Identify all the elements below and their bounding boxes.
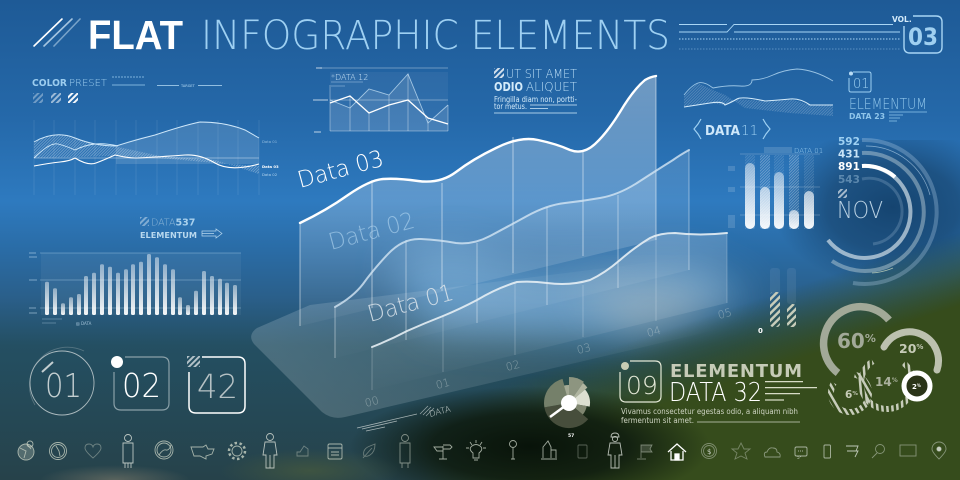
legend xyxy=(262,139,279,177)
badge: 01 Elementum Data 23: DATA 23 xyxy=(849,112,885,121)
60 percent: 60 xyxy=(837,329,865,353)
axis labels xyxy=(363,306,733,410)
icon: chat xyxy=(795,447,807,459)
number badge: 01 xyxy=(29,347,94,415)
subheading: DATA 32 xyxy=(669,378,762,408)
legend: Data 01 xyxy=(262,139,278,144)
badge: 01 Elementum Data 23: 01 xyxy=(853,77,870,92)
heading: color preset: PRESET xyxy=(69,78,107,89)
box 09 xyxy=(620,361,661,402)
icon: signpost xyxy=(434,445,452,459)
panel: radial November chart xyxy=(828,136,937,284)
bars xyxy=(45,254,237,315)
panel: Elementum Data 32 xyxy=(620,361,817,425)
text block: Ut sit amet: tor metus. xyxy=(494,102,527,111)
14 percent xyxy=(850,346,924,420)
icon: pin key xyxy=(510,440,516,459)
panel: polar chart xyxy=(544,377,590,439)
chart: Data 01 xyxy=(365,233,727,390)
label: Data 02: Data 02 xyxy=(326,208,418,256)
icon: woman xyxy=(400,434,410,468)
number badge: 42 xyxy=(187,356,245,413)
heading: ELEMENTUM xyxy=(670,361,802,382)
chart: Data 03 xyxy=(295,76,656,326)
14 percent: 14 xyxy=(875,375,892,389)
label: Data 11: 11 xyxy=(741,123,758,139)
icon: home xyxy=(668,444,686,460)
axis labels: 04 xyxy=(645,324,662,340)
icon: hatch xyxy=(494,68,504,78)
icon: title slashes xyxy=(34,19,80,46)
icon: clock xyxy=(50,442,66,460)
icon: tablet xyxy=(578,445,587,458)
icon: map xyxy=(191,445,214,459)
box 09: 09 xyxy=(626,371,658,400)
label: Data 11 xyxy=(694,119,770,139)
label: Data 11: DATA xyxy=(705,124,740,139)
series white xyxy=(330,96,448,124)
6 percent: 6 xyxy=(845,389,852,401)
body text xyxy=(621,406,798,425)
number badge: 02: 02 xyxy=(122,366,161,405)
badge: 01 Elementum Data 23 xyxy=(849,72,927,121)
title: INFOGRAPHIC ELEMENTS: INFOGRAPHIC ELEMENTS xyxy=(201,13,670,59)
text block: Ut sit amet: UT SIT AMET xyxy=(506,66,577,81)
axis caption: DATA xyxy=(357,405,452,431)
label: NOV: NOV xyxy=(837,198,883,224)
icon: woman xyxy=(123,434,133,468)
axis labels: 02 xyxy=(504,358,521,374)
caption: ▨ DATA xyxy=(76,321,92,326)
icon: bulb xyxy=(466,440,486,460)
volume box xyxy=(904,16,942,53)
icon: hand xyxy=(297,446,308,456)
icon: magnifier xyxy=(872,444,884,458)
values: 592 xyxy=(838,136,860,148)
label: Data 01: Data 01 xyxy=(365,280,457,328)
heading: color preset: COLOR xyxy=(32,78,67,89)
header title xyxy=(34,12,670,59)
heading: ELEMENTUM xyxy=(140,231,197,240)
heading: DATA537 xyxy=(151,218,195,228)
icon: arrow xyxy=(846,446,858,457)
icon: laptop xyxy=(900,445,916,456)
VOL label: VOL. xyxy=(892,15,912,24)
panel: Data 01 vertical bar chart: DATA 01 xyxy=(794,147,823,155)
panel: Data 12 line chart xyxy=(313,68,448,132)
icon: gear xyxy=(229,443,245,459)
swatches xyxy=(33,93,78,103)
icon: heart xyxy=(85,444,101,458)
bars xyxy=(745,163,814,229)
icon: buildings xyxy=(541,441,557,459)
caption xyxy=(42,319,92,326)
text block: Ut sit amet: Fringilla diam non, portti- xyxy=(494,95,577,104)
target rule xyxy=(157,84,222,88)
icon: dollar: $ xyxy=(707,448,711,456)
panel: polar chart: 57 xyxy=(568,433,574,439)
14 percent: % xyxy=(892,377,898,384)
axis labels: 05 xyxy=(716,306,733,322)
badge: 01 Elementum Data 23: ELEMENTUM xyxy=(849,95,927,113)
values xyxy=(838,136,860,186)
values: 431 xyxy=(838,148,860,160)
axis labels: 01 xyxy=(434,376,451,392)
axis labels: 03 xyxy=(575,341,592,357)
body text: fermentum sit amet. xyxy=(621,415,694,425)
panel: top-right mini area chart xyxy=(684,69,833,116)
icon: hatch xyxy=(838,189,847,198)
label: Data 03: Data 03 xyxy=(295,146,387,194)
values: 891 xyxy=(838,161,860,173)
icon: star xyxy=(732,443,750,459)
number badge: 42: 42 xyxy=(197,367,238,406)
60 percent xyxy=(824,307,889,373)
2 percent xyxy=(904,373,930,399)
label: DATA 12: *DATA 12 xyxy=(331,73,368,82)
number badge: 01: 01 xyxy=(45,366,82,405)
series grey xyxy=(330,74,448,123)
hatched mini bars xyxy=(758,268,796,335)
area series xyxy=(116,122,259,164)
title: FLAT: FLAT xyxy=(88,12,183,58)
legend: Data 02 xyxy=(262,172,278,177)
20 percent: 20 xyxy=(899,341,916,356)
icon: globe with pin xyxy=(18,441,34,460)
panel: platform base xyxy=(251,250,750,418)
60 percent: % xyxy=(865,332,876,345)
icon: leaf xyxy=(363,444,375,458)
heading: color preset xyxy=(32,78,107,89)
6 percent: % xyxy=(852,391,858,397)
20 percent xyxy=(884,332,938,370)
2 percent: 2 xyxy=(912,383,917,391)
20 percent: % xyxy=(916,343,923,351)
volume number: 03 xyxy=(908,23,938,51)
panel: Data 537 bar chart xyxy=(29,217,241,326)
pointer xyxy=(550,403,569,417)
icon: phone xyxy=(824,445,830,458)
heading xyxy=(140,217,222,240)
icon: man with cap xyxy=(608,433,622,468)
icon: flag xyxy=(637,445,652,459)
icon: globe xyxy=(155,441,173,459)
body text: Vivamus consectetur egestas odio, a aliquam nibh xyxy=(621,406,798,416)
6 percent xyxy=(827,370,873,416)
legend: Data 03 xyxy=(262,164,279,169)
axis labels: 00 xyxy=(363,394,380,410)
header rules and volume badge xyxy=(679,15,942,53)
panel: donut percentages xyxy=(824,307,938,420)
icon: cloud xyxy=(764,448,780,457)
icon: dollar xyxy=(702,444,716,458)
text block: Ut sit amet: ALIQUET xyxy=(526,80,578,94)
text block: Ut sit amet: ODIO xyxy=(494,80,523,94)
values: 543 xyxy=(838,174,860,186)
chart: Data 02 xyxy=(326,150,689,358)
icon row xyxy=(18,433,946,468)
panel: Data 01 vertical bar chart xyxy=(728,147,823,229)
hatched mini bars: 0 xyxy=(758,327,763,335)
text block: Ut sit amet xyxy=(494,66,578,113)
2 percent: % xyxy=(917,383,921,388)
target rule: TARGET xyxy=(180,84,196,88)
panel: color preset area chart xyxy=(32,77,279,195)
icon: location pin xyxy=(932,442,946,459)
icon: calendar xyxy=(328,444,342,459)
number badge: 02 xyxy=(111,356,169,410)
axis caption: DATA: DATA xyxy=(428,405,452,420)
icon: man xyxy=(263,434,277,468)
